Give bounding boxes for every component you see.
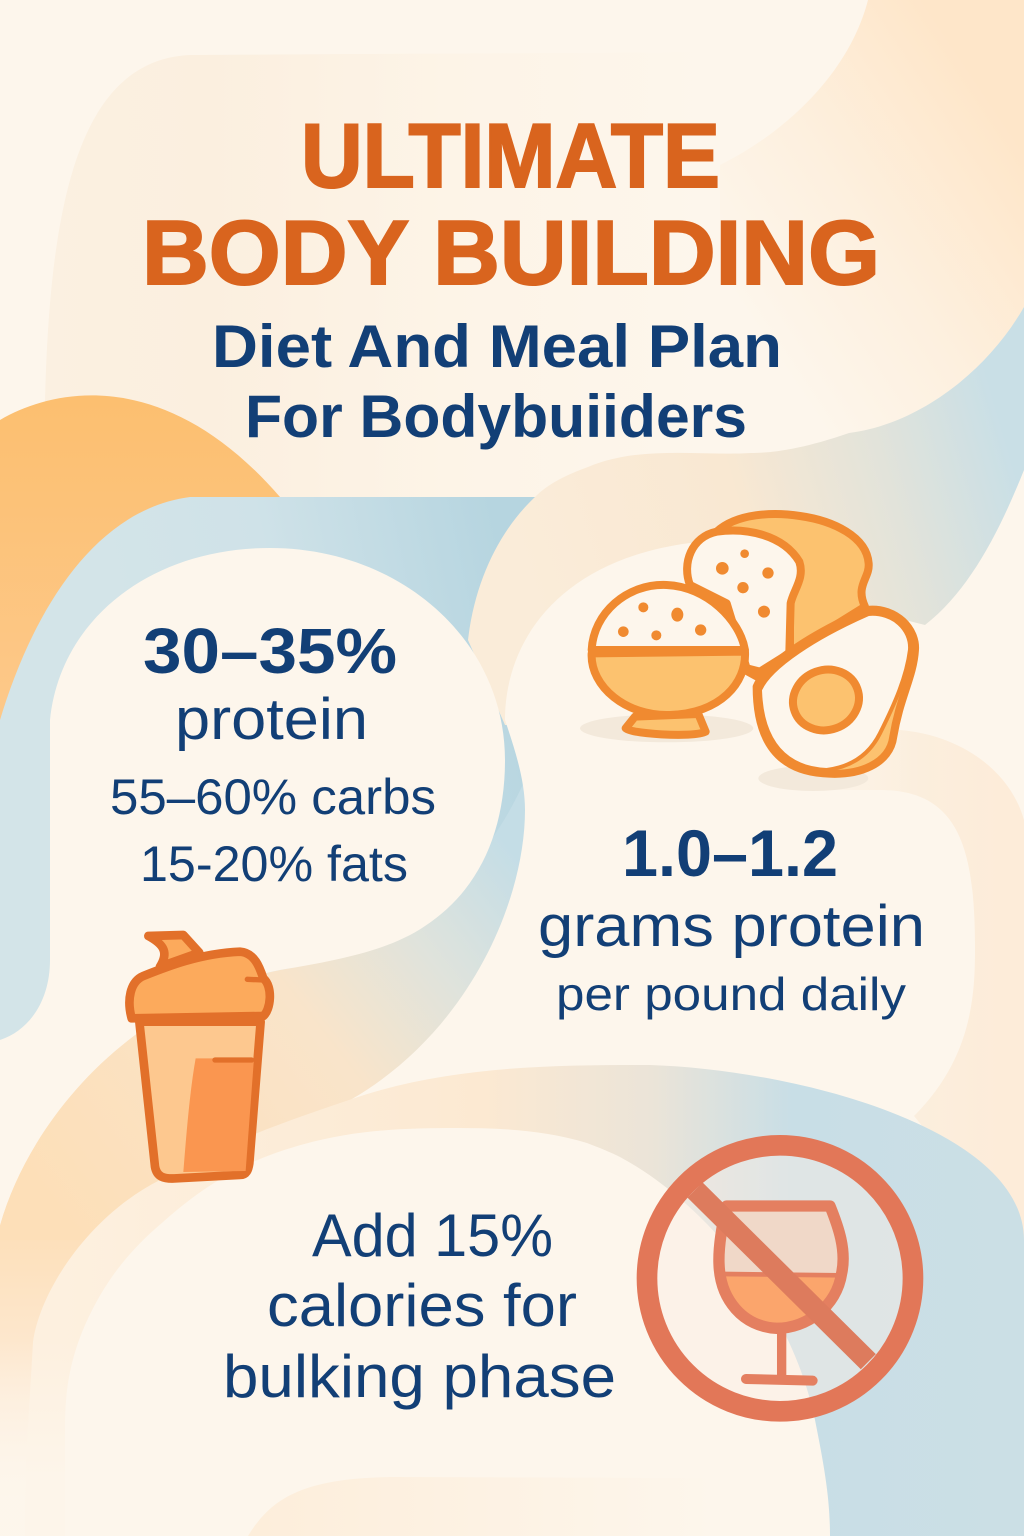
text block: protein per pound [538,816,925,1020]
text block: bulking calories: bulking phase [223,1343,616,1410]
text block: bulking calories: calories for [267,1272,577,1339]
text block: protein per pound: 1.0–1.2 [622,816,838,890]
text block: macronutrient split: 30–35% [143,615,397,687]
text block: bulking calories [223,1202,616,1410]
text block: macronutrient split: 15-20% fats [140,836,408,892]
icon: rice bowl, bread and avocado [580,514,915,791]
text block: bulking calories: Add 15% [312,1202,553,1269]
subtitle: For Bodybuiiders [245,383,747,450]
title: BODY BUILDING [142,203,880,304]
subtitle [212,313,782,450]
text block: protein per pound: per pound daily [556,968,906,1020]
icon: protein shaker [129,935,270,1179]
text block: macronutrient split: 55–60% carbs [110,769,436,825]
title: ULTIMATE [301,106,720,207]
text block: macronutrient split [110,615,436,892]
text block: protein per pound: grams protein [538,894,925,959]
text block: macronutrient split: protein [175,687,368,752]
title [142,106,880,304]
subtitle: Diet And Meal Plan [212,313,782,380]
icon: no alcohol sign [647,1145,913,1411]
